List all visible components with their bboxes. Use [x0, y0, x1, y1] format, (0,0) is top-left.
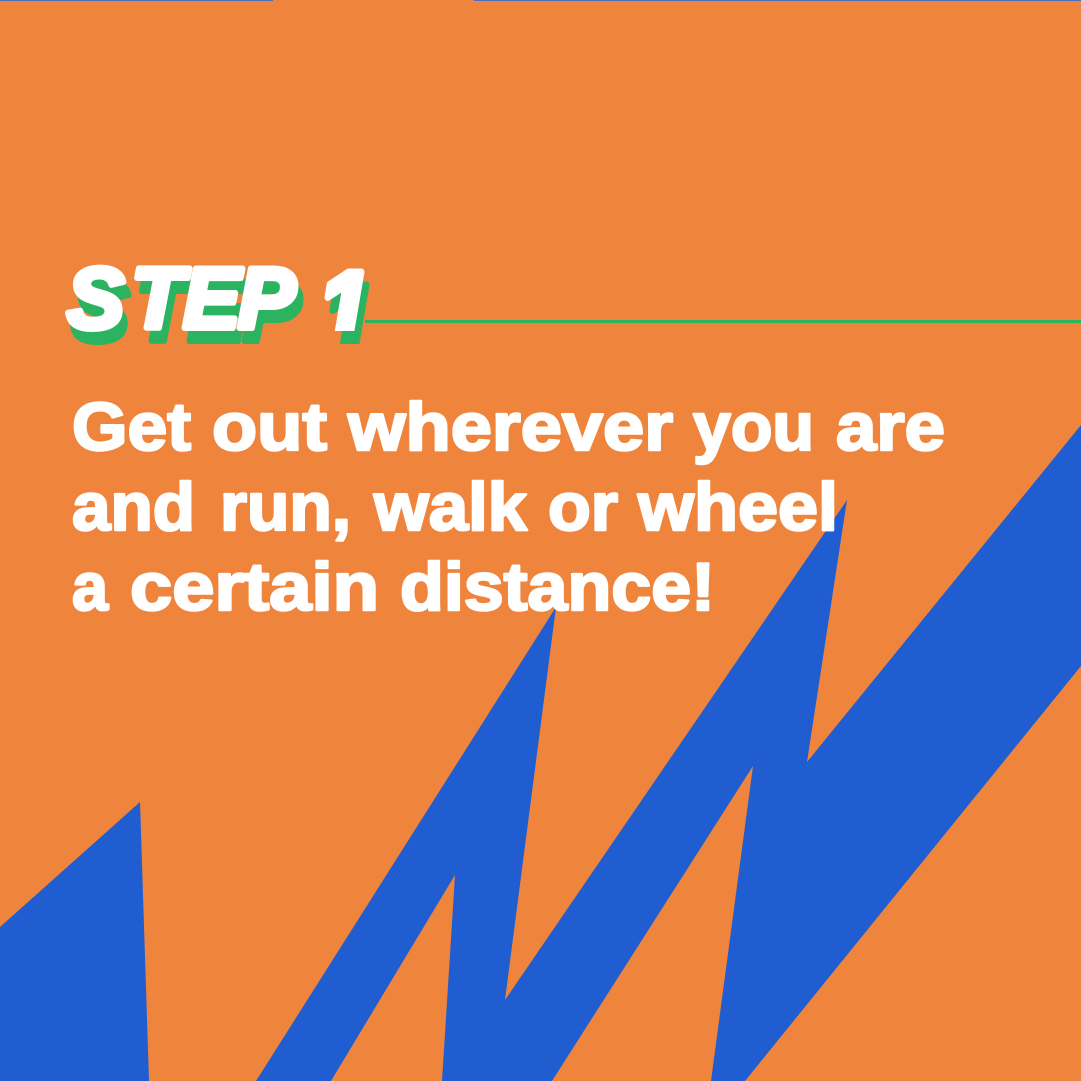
body text: a — [72, 549, 109, 625]
heading: STEP 1: STEP — [67, 251, 296, 347]
heading: STEP 1 — [65, 264, 370, 345]
zigzag shape: main blue lightning — [256, 425, 1081, 1081]
zigzag shape: left blue spike — [0, 802, 149, 1081]
body text: and — [72, 469, 195, 545]
body text: out — [212, 389, 327, 465]
body text: or — [548, 469, 618, 545]
body text: wherever — [347, 389, 673, 465]
body text — [72, 389, 945, 625]
body text: certain — [130, 549, 379, 625]
body text: run, — [220, 469, 351, 545]
heading: STEP 1: 1 — [322, 262, 376, 385]
body text: distance! — [400, 549, 715, 625]
body text: are — [836, 389, 945, 465]
heading: STEP 1: STEP — [72, 264, 301, 360]
body text: Get — [72, 389, 191, 465]
body text: wheel — [637, 469, 838, 545]
body text: walk — [373, 469, 527, 545]
body text: you — [693, 389, 814, 465]
heading: STEP 1: 1 — [317, 249, 371, 372]
green rule beside step heading — [365, 320, 1081, 323]
